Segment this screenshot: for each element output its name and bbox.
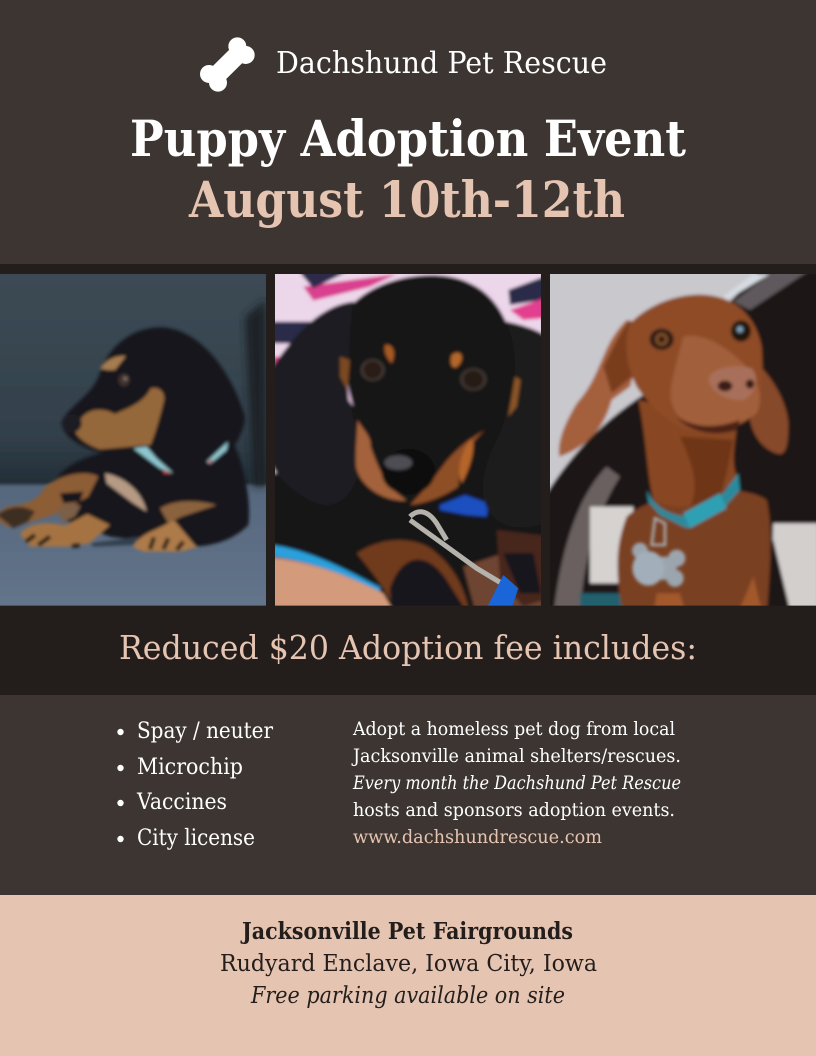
- photo: black and tan puppy on sofa: [0, 263, 277, 617]
- eyes: [650, 329, 674, 350]
- ears: [275, 300, 357, 504]
- left ear: [559, 320, 636, 457]
- shadow under dog: [90, 537, 140, 547]
- photo: brown dachshund with teal collar: [550, 274, 816, 606]
- icon: bone: [200, 37, 255, 92]
- list: fee inclusions: [117, 719, 273, 851]
- text block: adoption description: Adopt a homeless pet dog from local: [352, 719, 675, 740]
- car window frame: [550, 274, 816, 606]
- front leg: [20, 514, 110, 547]
- text block: adoption description: Every month the Dachshund Pet Rescue: [352, 773, 681, 794]
- nose: [382, 449, 435, 494]
- text block: adoption description: www.dachshundrescue.com: [353, 827, 602, 848]
- text block: adoption description: Jacksonville animal shelters/rescues.: [351, 746, 681, 767]
- arm: [275, 554, 394, 606]
- leash clip: [410, 512, 502, 583]
- muzzle tan: [356, 420, 407, 501]
- text block: adoption description: [351, 719, 681, 848]
- front paw: [133, 519, 197, 552]
- fee heading: Reduced $20 Adoption fee includes:: [119, 628, 697, 667]
- rear leg: [0, 473, 98, 527]
- text block: adoption description: hosts and sponsors adoption events.: [353, 800, 675, 821]
- title: Puppy Adoption Event: [130, 109, 686, 168]
- panel: header background: [0, 0, 816, 264]
- snout: [671, 336, 760, 427]
- collar: [647, 473, 740, 528]
- collar: [133, 447, 173, 473]
- neck: [638, 400, 737, 507]
- panel: venue background: [0, 895, 816, 1056]
- text block: venue: Rudyard Enclave, Iowa City, Iowa: [220, 949, 597, 977]
- head: [349, 275, 515, 505]
- text block: venue: Free parking available on site: [250, 981, 565, 1009]
- pet tag: [632, 518, 685, 587]
- photo: black puppy with leash: [275, 274, 541, 606]
- muzzle tan: [75, 388, 164, 449]
- body: [275, 470, 541, 606]
- right ear: [750, 360, 788, 454]
- text block: venue: [220, 917, 597, 1009]
- leg tan: [357, 540, 470, 617]
- text block: venue: Jacksonville Pet Fairgrounds: [240, 917, 573, 945]
- chest patch: [105, 473, 147, 512]
- head and ear: [63, 325, 246, 454]
- panel: details background: [0, 695, 816, 895]
- eyes: [361, 359, 385, 381]
- head: [627, 295, 762, 433]
- body: [617, 490, 770, 617]
- organisation name: Dachshund Pet Rescue: [276, 46, 607, 81]
- panel: photo strip background: [0, 264, 816, 695]
- event date: August 10th-12th: [188, 170, 625, 229]
- list: fee inclusions: Vaccines: [136, 790, 227, 815]
- list: fee inclusions: Microchip: [137, 755, 243, 780]
- body: [55, 437, 249, 547]
- list: fee inclusions: City license: [137, 826, 255, 851]
- list: fee inclusions: Spay / neuter: [137, 719, 273, 744]
